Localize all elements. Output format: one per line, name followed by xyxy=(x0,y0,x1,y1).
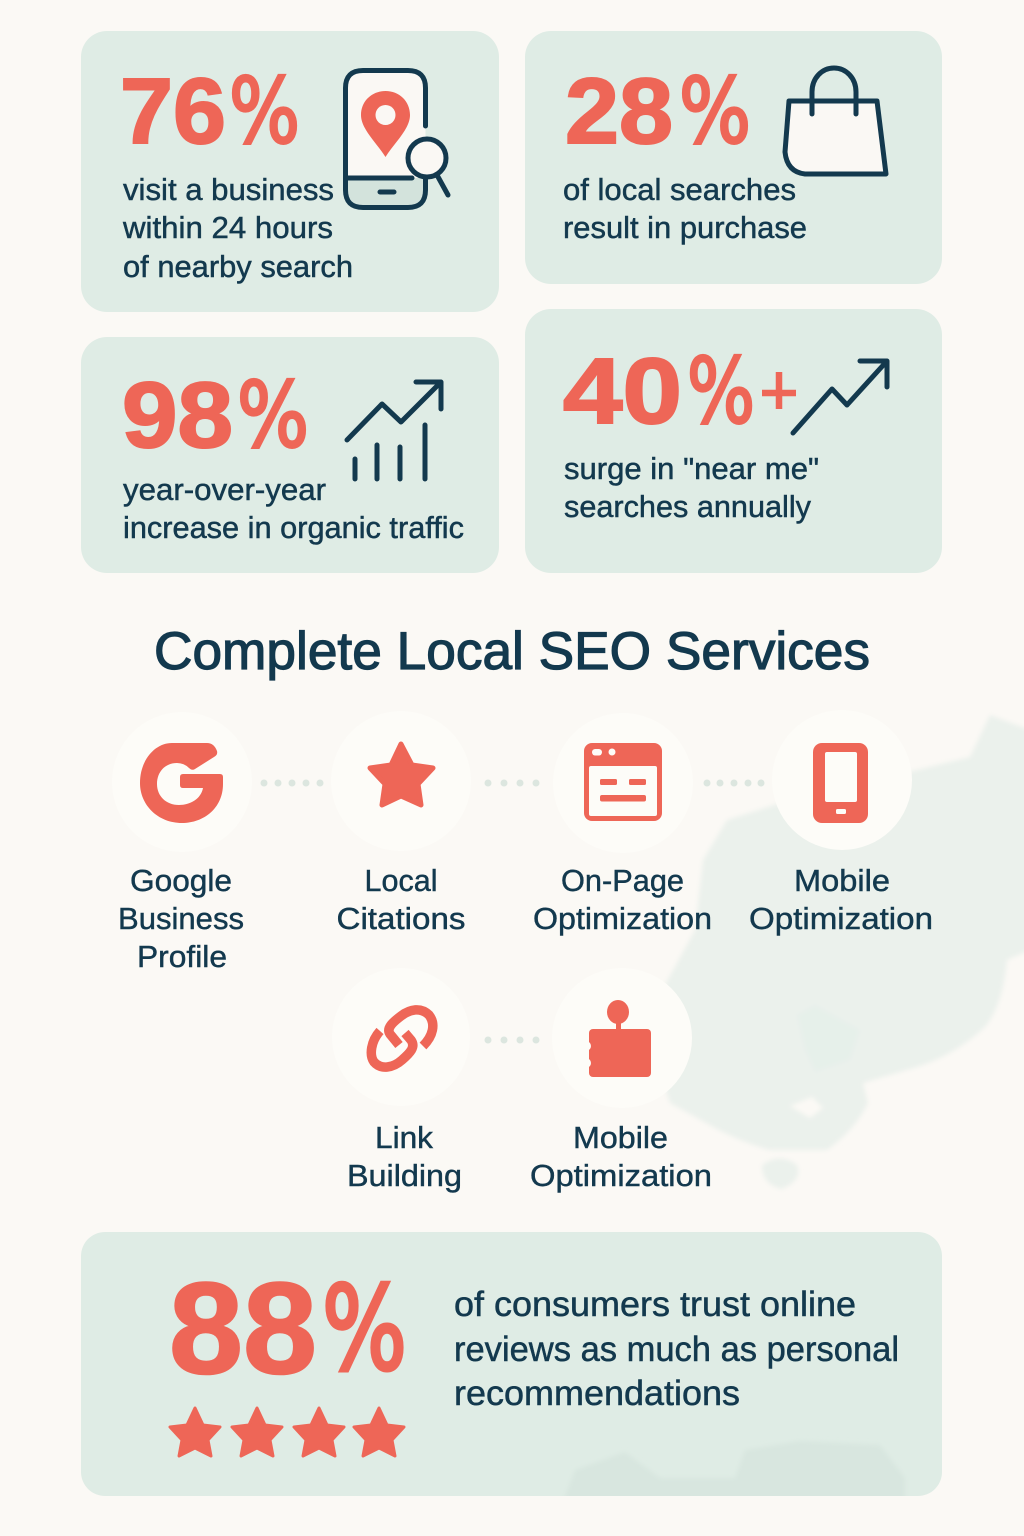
label xyxy=(530,1120,712,1193)
connector dots xyxy=(704,780,764,786)
text: 76% description xyxy=(122,172,353,284)
label: Link xyxy=(375,1120,434,1155)
label: Optimization xyxy=(749,901,933,936)
text: 28% description: of local searches xyxy=(563,172,796,207)
label: Local xyxy=(364,863,438,898)
label: Building xyxy=(347,1158,462,1193)
text: 88% description: of consumers trust online xyxy=(454,1285,856,1324)
text: 98% description: year-over-year xyxy=(123,472,326,507)
text: 76% description: of nearby search xyxy=(123,249,353,284)
service: Local Citations xyxy=(331,711,471,936)
service: Link Building xyxy=(332,968,470,1193)
text: 28% description: result in purchase xyxy=(563,210,807,245)
icon: mobile phone xyxy=(813,743,868,823)
panel: 98% stat xyxy=(81,337,499,573)
stat: 28% xyxy=(565,59,751,164)
stat: 98% xyxy=(122,363,309,468)
label xyxy=(118,863,244,974)
text: 88% description: recommendations xyxy=(454,1374,740,1413)
label: Profile xyxy=(137,939,227,974)
service: Mobile Optimization xyxy=(749,710,933,936)
text: 88% description: reviews as much as personal xyxy=(454,1330,899,1369)
stat: 76%: 76 xyxy=(120,59,226,163)
label: Business xyxy=(118,901,244,936)
stat: 98%: % xyxy=(237,363,309,468)
label xyxy=(533,863,712,936)
icon: four stars xyxy=(170,1408,404,1456)
label: Mobile xyxy=(573,1120,668,1155)
stat: 88% xyxy=(169,1255,407,1401)
text: 98% description: increase in organic traffic xyxy=(123,510,464,545)
icon: rising arrow xyxy=(793,361,887,433)
stat: 88%: % xyxy=(322,1262,407,1397)
label xyxy=(749,863,933,936)
text: 76% description: within 24 hours xyxy=(122,210,333,245)
icon: chain link xyxy=(371,1010,433,1067)
text: 40%+ description: searches annually xyxy=(564,489,811,524)
stat: 40%+: % xyxy=(687,339,755,444)
stat: 76% xyxy=(120,59,300,164)
label: Google xyxy=(130,863,232,898)
icon: phone with map pin and magnifier xyxy=(346,70,448,208)
icon: shopping bag xyxy=(785,68,886,174)
text: 98% description xyxy=(123,472,464,545)
title: Complete Local SEO Services xyxy=(154,622,870,681)
icon: star xyxy=(370,744,433,805)
stat: 88%: 88 xyxy=(169,1255,317,1401)
icon: growth chart with arrow xyxy=(347,382,441,479)
panel: 76% stat xyxy=(81,31,499,312)
icon: G xyxy=(140,743,223,823)
label xyxy=(347,1120,462,1193)
label: Optimization xyxy=(530,1158,712,1193)
connector dots xyxy=(484,1036,540,1044)
label: Optimization xyxy=(533,901,712,936)
service: On-Page Optimization xyxy=(533,713,712,936)
stat: 76%: % xyxy=(229,59,300,164)
connector dots xyxy=(484,780,540,786)
text: 88% description xyxy=(454,1285,899,1413)
panel: 88% stat xyxy=(81,1232,942,1510)
label: Citations xyxy=(336,901,466,936)
label: On-Page xyxy=(561,863,684,898)
stat: 28%: % xyxy=(679,59,751,164)
service: Mobile Optimization (second) xyxy=(530,968,712,1193)
panel: 40%+ stat xyxy=(525,309,942,573)
stat: 98%: 98 xyxy=(122,363,233,467)
stat: 40%+ xyxy=(563,339,796,444)
text: 76% description: visit a business xyxy=(123,172,334,207)
stat: 28%: 28 xyxy=(565,59,673,163)
stat: 40%+: 40 xyxy=(563,339,682,443)
text: 40%+ description: surge in "near me" xyxy=(564,451,819,486)
label: Mobile xyxy=(794,863,890,898)
service: Google Business Profile xyxy=(112,712,252,974)
panel: 28% stat xyxy=(525,31,942,284)
text: 28% description xyxy=(563,172,807,245)
connector dots xyxy=(260,780,324,786)
text: 40%+ description xyxy=(564,451,819,524)
label xyxy=(336,863,466,936)
icon: fist with knob xyxy=(581,1000,651,1077)
icon: browser window xyxy=(584,743,662,821)
